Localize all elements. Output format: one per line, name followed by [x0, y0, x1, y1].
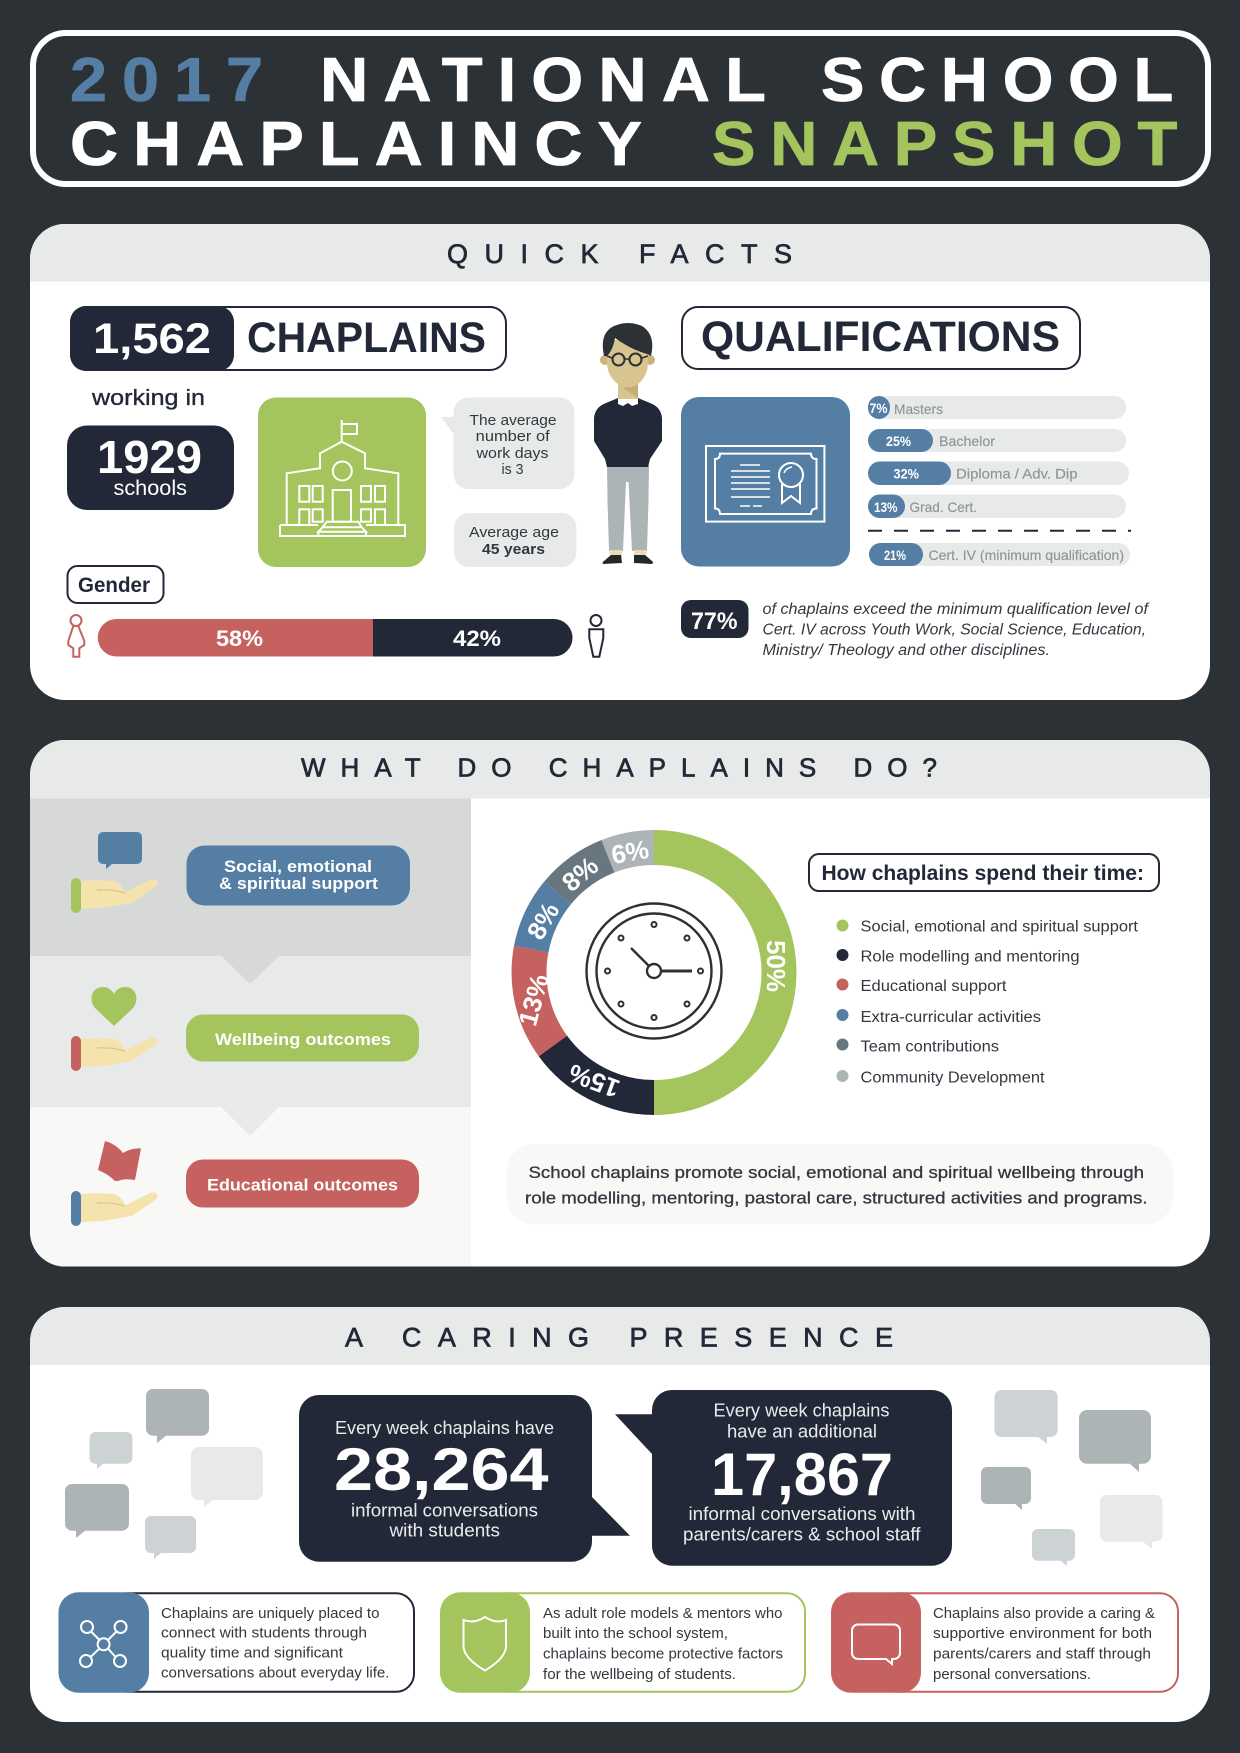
gender bar	[98, 619, 573, 656]
icon: school	[258, 398, 426, 567]
icon: shield	[440, 1592, 530, 1693]
icon: speech bubble	[98, 832, 142, 869]
legend: Team contributions	[860, 1038, 999, 1056]
icon: female	[68, 615, 84, 657]
bar: diploma 32%: 32%	[894, 466, 919, 482]
callout: average age: 45 years	[482, 541, 545, 558]
label: gender: Gender	[78, 574, 150, 597]
bar: grad cert 13%: 13%	[874, 500, 898, 515]
text: qualification note: of chaplains exceed the minimum qualification level of	[762, 601, 1150, 618]
row: educational	[30, 1107, 471, 1266]
text: conversations about everyday life.	[161, 1664, 390, 1682]
heading: quick facts: QUICK FACTS	[447, 239, 792, 269]
text	[933, 1605, 1155, 1683]
card: supportive environment	[831, 1592, 1178, 1693]
icon: clock	[586, 904, 722, 1038]
panel: what do chaplains do	[30, 740, 1210, 1266]
callout: summary: role modelling, mentoring, pastoral care, structured activities and programs.	[525, 1188, 1148, 1208]
bar: cert iv 21%	[869, 543, 1130, 566]
icon: male	[589, 615, 603, 657]
callout: average age: Average age	[469, 524, 559, 541]
card: connect with students	[58, 1592, 414, 1693]
bar: bachelor 25%	[868, 429, 1126, 452]
pill: wellbeing: Wellbeing outcomes	[215, 1030, 391, 1049]
bar: diploma 32%: Diploma / Adv. Dip	[956, 466, 1078, 482]
heading: a caring presence: A CARING PRESENCE	[345, 1322, 893, 1352]
text: built into the school system,	[543, 1625, 728, 1642]
callout: 28,264 conversations with students: Every week chaplains have	[335, 1418, 554, 1438]
icon: certificate	[681, 397, 850, 566]
icon: network	[58, 1592, 149, 1693]
stat: 1929 schools	[67, 426, 234, 510]
text: personal conversations.	[933, 1666, 1091, 1683]
donut chart: 8%	[521, 897, 565, 945]
heading: what do chaplains do: WHAT DO CHAPLAINS DO?	[301, 752, 937, 782]
text: for the wellbeing of students.	[543, 1666, 736, 1683]
bar: masters 7%: Masters	[894, 401, 943, 417]
callout: average work days: work days	[475, 445, 548, 462]
callout: 28,264 conversations with students	[299, 1395, 630, 1562]
text: parents/carers and staff through	[933, 1646, 1151, 1662]
panel: a caring presence	[30, 1307, 1210, 1722]
callout: average work days: number of	[476, 428, 551, 445]
stat: 1929 schools: 1929	[97, 431, 202, 483]
icon: heart	[92, 987, 136, 1026]
text: quality time and significant	[161, 1644, 344, 1662]
title banner: 2017	[70, 46, 278, 115]
pill: social support: & spiritual support	[219, 874, 378, 893]
callout: 17,867 conversations with parents	[615, 1390, 952, 1566]
callout: average work days: The average	[470, 412, 556, 429]
pill: educational	[186, 1160, 419, 1208]
pill: social support	[186, 846, 410, 906]
heading: qualifications: QUALIFICATIONS	[701, 313, 1060, 361]
text: working in: working in	[91, 385, 205, 410]
bar: masters 7%	[868, 396, 1126, 419]
text: chaplains become protective factors	[543, 1646, 783, 1662]
callout: 17,867 conversations with parents: parents/carers & school staff	[683, 1524, 922, 1544]
speech bubbles: right cluster	[981, 1390, 1162, 1566]
text	[161, 1605, 390, 1682]
legend	[836, 918, 1139, 1086]
stat: 1,562 chaplains: CHAPLAINS	[247, 314, 486, 362]
callout: summary	[506, 1144, 1173, 1224]
row: wellbeing	[30, 956, 471, 1107]
speech bubbles: left cluster	[65, 1389, 263, 1559]
label: gender	[68, 566, 164, 603]
legend: Educational support	[860, 978, 1007, 995]
title banner: CHAPLAINCY	[70, 110, 657, 179]
text	[543, 1605, 783, 1683]
pill: social support: Social, emotional	[224, 857, 372, 876]
bar: grad cert 13%: Grad. Cert.	[910, 499, 977, 515]
stat: 77%: 77%	[691, 608, 738, 635]
stat: 1,562 chaplains: 1,562	[93, 315, 211, 363]
gender bar: 58%	[216, 626, 263, 651]
bar: grad cert 13%	[868, 494, 1126, 518]
bar: bachelor 25%: Bachelor	[939, 433, 995, 449]
bar: bachelor 25%: 25%	[886, 434, 911, 449]
stat: 1,562 chaplains	[70, 306, 506, 371]
donut chart: 50%	[761, 940, 791, 992]
bar: cert iv 21%: Cert. IV (minimum qualification)	[928, 547, 1124, 563]
callout: average age	[454, 513, 576, 567]
stat: 1929 schools: schools	[114, 477, 187, 500]
icon: book	[98, 1141, 141, 1181]
pill: wellbeing	[186, 1014, 419, 1062]
callout: 17,867 conversations with parents: Every week chaplains	[714, 1400, 890, 1420]
icon: hand	[71, 1036, 158, 1071]
bar: diploma 32%	[868, 462, 1129, 485]
donut chart: 13%	[512, 971, 555, 1029]
text: Chaplains also provide a caring &	[933, 1605, 1155, 1622]
text: qualification note: Cert. IV across Youth Work, Social Science, Education,	[762, 622, 1146, 638]
title banner: SNAPSHOT	[712, 110, 1192, 179]
callout: 17,867 conversations with parents: informal conversations with	[688, 1504, 916, 1524]
legend: Community Development	[860, 1070, 1045, 1086]
callout: average work days	[441, 398, 574, 489]
donut chart: 6%	[609, 834, 651, 870]
title banner: NATIONAL	[320, 46, 781, 115]
donut chart: 15%	[564, 1058, 624, 1104]
row: social support	[30, 798, 471, 956]
heading: how chaplains spend their time: How chaplains spend their time:	[822, 862, 1144, 885]
donut chart: 8%	[556, 850, 604, 898]
bar: cert iv 21%: 21%	[884, 548, 906, 563]
callout: 28,264 conversations with students: informal conversations	[351, 1500, 538, 1520]
callout: 28,264 conversations with students: 28,264	[334, 1436, 549, 1503]
gender bar: 42%	[453, 626, 501, 651]
icon: speech outline	[831, 1592, 921, 1693]
legend: Social, emotional and spiritual support	[860, 918, 1139, 936]
text: qualification note	[762, 601, 1150, 659]
text: Chaplains are uniquely placed to	[161, 1605, 380, 1622]
donut chart	[512, 834, 791, 1104]
text: connect with students through	[161, 1624, 367, 1642]
callout: 17,867 conversations with parents: 17,867	[711, 1441, 893, 1508]
panel: quick facts	[30, 224, 1210, 700]
stat: 77%	[681, 600, 748, 638]
text: supportive environment for both	[933, 1625, 1152, 1642]
title banner: SCHOOL	[821, 46, 1188, 115]
heading: how chaplains spend their time	[809, 854, 1159, 891]
callout: summary: School chaplains promote social, emotional and spiritual wellbeing through	[528, 1163, 1144, 1182]
callout: 28,264 conversations with students: with students	[388, 1520, 500, 1540]
bar: masters 7%: 7%	[870, 401, 888, 416]
figure: chaplain	[594, 323, 662, 564]
card: protective factors	[440, 1592, 805, 1693]
text: As adult role models & mentors who	[543, 1605, 782, 1622]
callout: average work days: is 3	[502, 461, 524, 478]
pill: educational: Educational outcomes	[207, 1176, 398, 1194]
icon: hand	[71, 1191, 158, 1226]
callout: 17,867 conversations with parents: have an additional	[727, 1422, 877, 1442]
legend: Extra-curricular activities	[860, 1009, 1041, 1026]
legend: Role modelling and mentoring	[860, 948, 1080, 966]
title banner	[33, 33, 1208, 184]
icon: hand	[71, 878, 158, 913]
text: qualification note: Ministry/ Theology and other disciplines.	[762, 642, 1050, 659]
